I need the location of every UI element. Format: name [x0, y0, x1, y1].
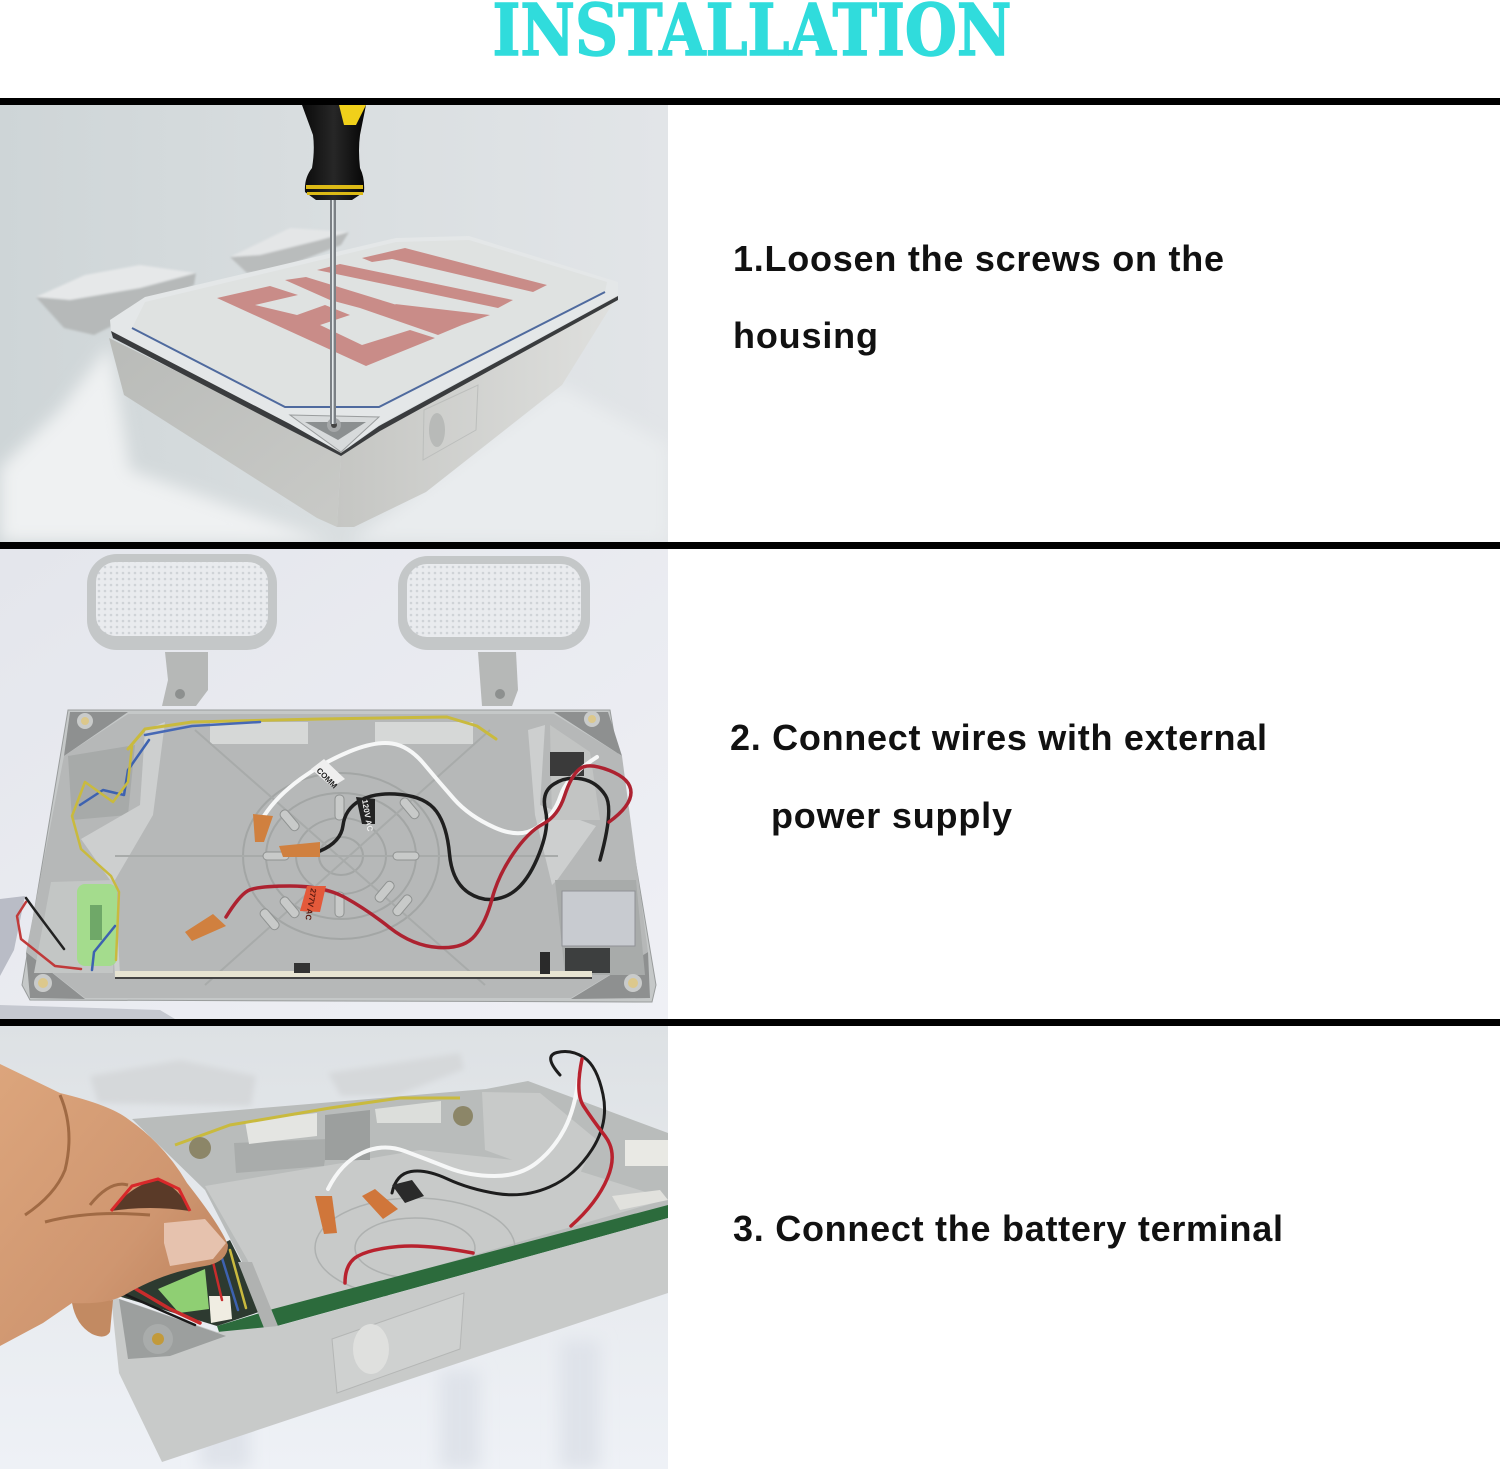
right compartment and transformer: [550, 725, 600, 820]
icon: battery held in hand: [158, 1269, 209, 1313]
icon: wire nuts: [185, 814, 320, 941]
mirror panel: [132, 240, 607, 407]
blurred lamps: [90, 1053, 464, 1106]
open housing back wall: [132, 1081, 668, 1322]
text block: step 1: 1.Loosen the screws on the: [733, 238, 1224, 279]
floor plate rings: [315, 1198, 515, 1298]
corner bracket and screw: [290, 415, 379, 452]
panel: step 1 photo: [0, 105, 668, 542]
wall labels: [210, 722, 308, 744]
gap between finger and thumb: [111, 1179, 190, 1211]
label plate: [332, 1293, 464, 1393]
top wires: [175, 1098, 460, 1145]
icon: emergency lamps, blurred: [36, 228, 349, 335]
wires: [17, 717, 631, 970]
bottom circuit strip: [115, 952, 592, 979]
connector: [209, 1296, 232, 1323]
corner wells: [26, 712, 650, 999]
wires: [122, 1051, 612, 1325]
corner screws: [36, 713, 640, 990]
front wall: [111, 1218, 668, 1462]
wire labels: 120V AC: [360, 799, 375, 832]
wire nuts: [315, 1189, 398, 1234]
green PCB: [217, 1205, 668, 1335]
icon: battery: [77, 884, 117, 966]
wire labels: 277V AC: [303, 888, 318, 921]
icon: screwdriver: [302, 105, 366, 424]
wire labels: [300, 759, 375, 921]
wall panels and labels: [234, 1139, 328, 1173]
wire labels: COMM: [315, 766, 339, 791]
text block: step 2: 2. Connect wires with external: [730, 717, 1267, 758]
divider bars: [0, 98, 1500, 1026]
test button: [353, 1324, 389, 1374]
text block: step 1: [733, 238, 1224, 356]
compartment: upper left: [68, 745, 135, 820]
icon: left lamp: [87, 554, 277, 706]
floor: [205, 1150, 668, 1313]
icon: hand: [0, 1064, 228, 1346]
battery compartment: [34, 880, 115, 973]
panel: step 2 photo: [0, 549, 668, 1019]
mounting plate rings: [115, 730, 558, 985]
open housing: [22, 710, 656, 1002]
screw post: [143, 1324, 173, 1354]
thumb nail: [164, 1219, 226, 1266]
EXIT lettering: [217, 248, 547, 366]
connector at right: [625, 1140, 668, 1166]
text block: step 3: 3. Connect the battery terminal: [733, 1208, 1283, 1249]
inner floor: [26, 714, 648, 998]
panel: step 3 photo: [0, 1026, 668, 1469]
cloth stripes: [200, 1340, 600, 1469]
text block: step 1: housing: [733, 315, 878, 356]
exit sign housing: [109, 338, 341, 527]
text block: step 2: [730, 717, 1267, 836]
text block: step 2: power supply: [771, 795, 1012, 836]
separator wall: [238, 1262, 278, 1328]
wire terminals: [189, 1137, 211, 1159]
white cloth: [0, 345, 668, 542]
label on black wire: [392, 1180, 424, 1203]
mounting slots: [258, 795, 421, 931]
compartment behind the hand: [115, 1240, 265, 1326]
icon: right lamp: [398, 556, 590, 706]
dark cloth fold at lower left: [0, 896, 25, 976]
finger creases: [25, 1095, 150, 1222]
label plate on housing: [429, 413, 445, 447]
baffles: [81, 722, 165, 979]
clear cover frame: [110, 237, 444, 449]
